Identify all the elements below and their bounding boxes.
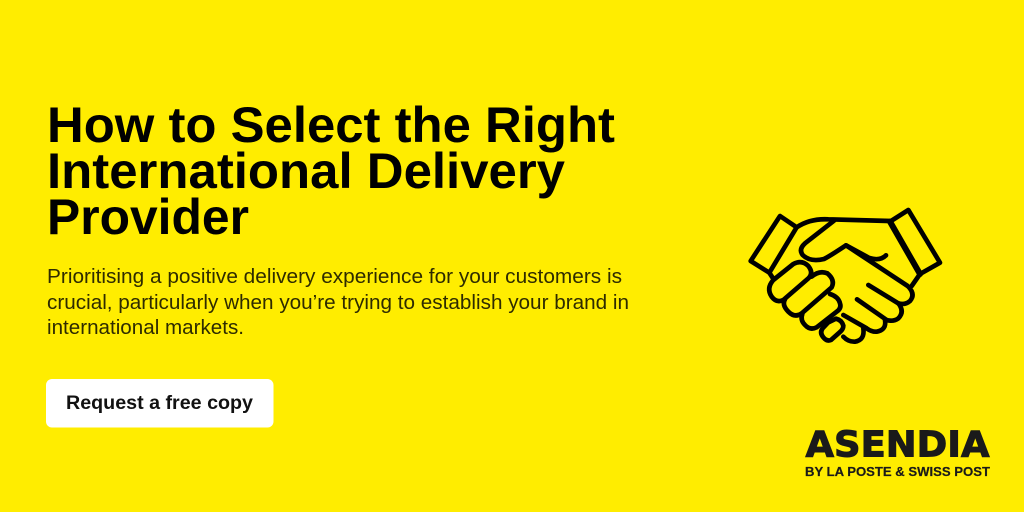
button: request a free copy [46, 379, 274, 428]
description text: international markets. [47, 317, 244, 339]
title: Provider [47, 189, 249, 245]
title: International Delivery [47, 143, 565, 199]
logo wordmark: ASENDIA [806, 424, 990, 466]
button: request a free copy: Request a free copy [66, 392, 253, 414]
description text [47, 266, 629, 339]
icon: handshake [748, 208, 942, 344]
description text: crucial, particularly when you’re trying to establish your brand in [47, 292, 629, 314]
logo tagline: BY LA POSTE & SWISS POST [805, 464, 990, 479]
description text: Prioritising a positive delivery experience for your customers is [47, 266, 622, 288]
title [47, 97, 615, 245]
logo: Asendia [805, 424, 990, 479]
title: How to Select the Right [47, 97, 615, 153]
